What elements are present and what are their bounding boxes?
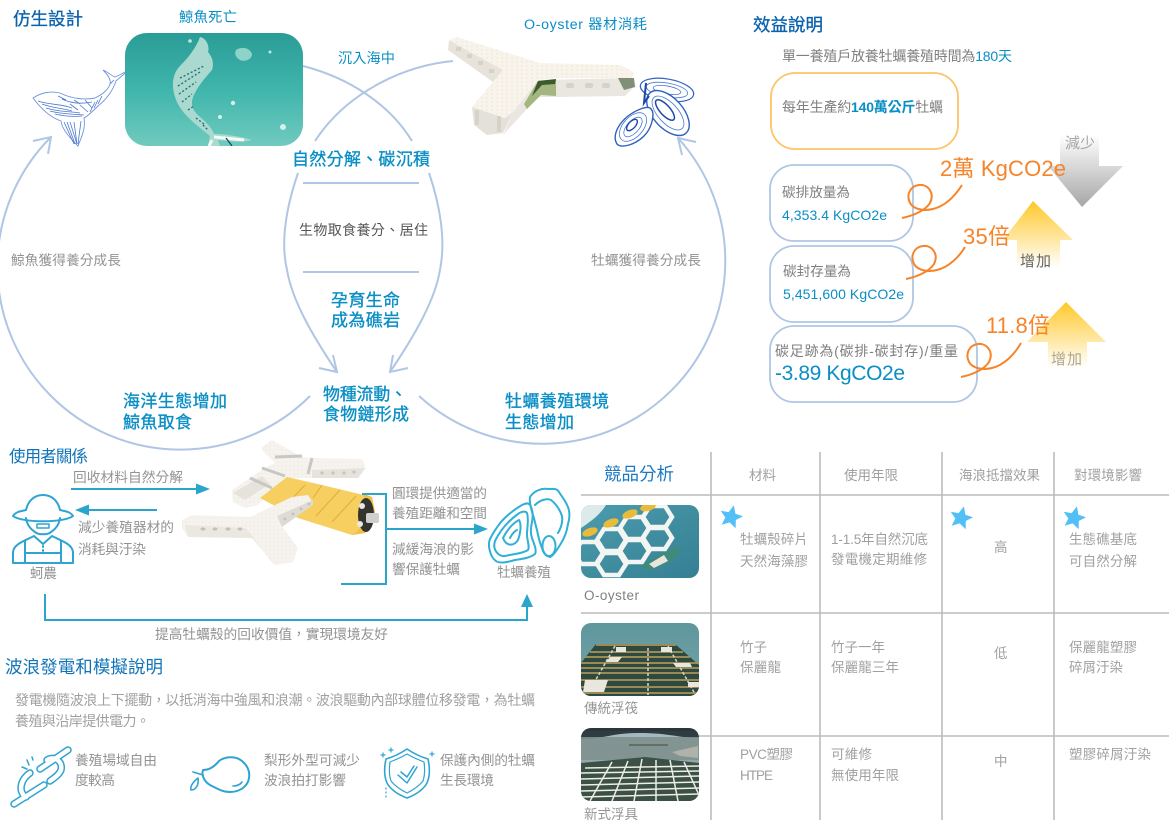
row: traditional raft data: 保麗龍塑膠 [1069,639,1137,655]
row: new float data: PVC塑膠 [740,746,793,762]
arrow: inner left arc to species flow [284,173,337,372]
label: O-oyster equipment wear: O-oyster 器材消耗 [524,17,647,33]
row: new float data [740,746,1151,783]
text: free farming area: 養殖場域自由 [75,752,157,768]
text: reduce equipment wear: 消耗與汙染 [78,542,146,557]
arc: upper left crossing [303,66,412,141]
text: free farming area [75,752,157,788]
label: oyster farmer: 蚵農 [30,566,57,581]
row: traditional raft data: 保麗龍 [740,659,782,675]
panel: competitor analysis table [574,452,1169,822]
row: traditional raft data: 低 [994,646,1008,661]
text: ring provides spacing [392,485,487,521]
label: new float: 新式浮具 [584,807,638,822]
header row: 對環境影響 [1074,467,1142,483]
text: nurture life, become reef: 成為礁岩 [331,311,400,330]
text: species flow, food chain [323,385,409,424]
text: generator description: 發電機隨波浪上下擺動，以抵消海中強風和浪潮。波浪驅動內部球體位移發電，為牡蠣 [15,692,535,708]
arrow: inner right arc to species flow [390,173,442,372]
arrow: increase two: 增加 [1051,351,1082,368]
text: pear shape reduces waves: 波浪拍打影響 [264,772,346,788]
icon: oyster farmer [13,495,73,563]
card: carbon footprint: 碳足跡為(碳排-碳封存)/重量 [775,343,958,359]
card: carbon emissions: 4,353.4 KgCO2e [782,207,887,223]
text: generator description: 養殖與沿岸提供電力。 [15,713,150,729]
row: O-oyster data: 生態礁基底 [1069,531,1137,547]
label: O-oyster: O-oyster [584,588,640,603]
text: marine ecology grows [123,392,227,432]
card: carbon emissions: 碳排放量為 [782,185,850,200]
arrow: decrease [1048,135,1123,207]
figure: 11.8 times: 11.8倍 [986,313,1050,338]
text: raise shell recycling value: 提高牡蠣殼的回收價值，實現環境友好 [155,626,388,642]
row: traditional raft data: 竹子一年 [831,640,885,655]
text: marine ecology grows: 海洋生態增加 [123,392,227,411]
arrow: decrease: 減少 [1065,135,1095,152]
text: generator description [15,692,535,729]
text: pear shape reduces waves [264,752,360,788]
row: new float data: HTPE [740,768,773,783]
photo: whale fall on sea floor [125,33,303,146]
text: organisms feed and live: 生物取食養分、居住 [299,222,428,238]
text: ring provides spacing: 養殖距離和空間 [392,505,487,521]
text: reduce wave impact: 減緩海浪的影 [392,541,474,557]
text: protect inner oysters [440,753,535,788]
card: carbon footprint: -3.89 KgCO2e [775,362,905,385]
row: traditional raft data [740,639,1137,675]
label: sinking into the sea: 沉入海中 [338,51,395,67]
icon: sketched oysters [614,74,697,146]
row: new float data: 無使用年限 [831,767,900,783]
text: marine ecology grows: 鯨魚取食 [123,413,192,432]
card: annual production: 每年生產約140萬公斤牡蠣 [782,99,943,115]
arrow: to device [71,484,210,494]
panel: wave power and simulation [5,657,535,804]
text: nurture life, become reef: 孕育生命 [331,291,400,310]
icon: oyster outline [489,489,569,563]
image: O-oyster hexagon array [581,505,699,578]
row: new float data: 可維修 [831,747,872,762]
header row: 使用年限 [844,467,898,483]
row: O-oyster data [740,531,1137,569]
arrow: farmer to oyster farming [45,594,533,620]
text: species flow, food chain: 物種流動、 [323,385,407,404]
connector: device to oyster farming [341,494,488,584]
text: free farming area: 度較高 [75,772,115,788]
image: O-oyster Y float [448,37,636,135]
arrow: increase two [1027,302,1106,368]
text: oyster habitat grows: 牡蠣養殖環境 [505,392,609,411]
row: new float data: 塑膠碎屑汙染 [1069,746,1151,762]
header row: 海浪抵擋效果 [959,468,1040,483]
icon: orange loop two [906,246,965,279]
row: traditional raft data: 碎屑汙染 [1069,660,1123,675]
image: wave generator device [182,440,379,565]
label: whale death: 鯨魚死亡 [179,9,237,26]
row: traditional raft data: 保麗龍三年 [831,659,899,675]
icon: star material [717,503,745,529]
text: oyster growth: 牡蠣獲得養分成長 [591,252,701,268]
text: species flow, food chain: 食物鏈形成 [323,405,409,424]
divider: lower [303,271,419,273]
text: reduce equipment wear: 減少養殖器材的 [78,519,174,535]
card: annual production [771,73,958,149]
heading: user relationship: 使用者關係 [9,446,88,466]
figure: 20,000 KgCO2e: 2萬 KgCO2e [940,156,1066,181]
row: O-oyster data: 天然海藻膠 [740,553,808,569]
image: traditional bamboo raft [581,623,699,696]
panel: user relationship [9,440,569,642]
icon: pear [191,757,249,792]
divider: upper [303,182,419,184]
arrow: left outer circle to whale [0,137,310,450]
text: reduce wave impact: 響保護牡蠣 [392,561,460,577]
text: pear shape reduces waves: 梨形外型可減少 [264,752,360,768]
label: oyster farming: 牡蠣養殖 [497,564,551,580]
icon: orange loop one [902,185,962,218]
text: nurture life, become reef [331,291,400,330]
text: whale growth: 鯨魚獲得養分成長 [11,252,121,268]
card: carbon footprint [770,326,977,402]
table grid [581,452,1169,820]
text: ring provides spacing: 圓環提供適當的 [392,485,487,501]
icon: star environment [1060,504,1088,530]
icon: orange loop three [961,343,1021,377]
panel: benefits [753,15,1123,402]
row: O-oyster data: 牡蠣殼碎片 [740,532,808,547]
text: reduce equipment wear [78,519,174,557]
text: recycled material decomposes: 回收材料自然分解 [73,469,183,485]
panel: biomimetic design cycle [0,9,725,450]
header row [749,467,1142,483]
row: traditional raft data: 竹子 [740,640,767,655]
heading: wave power: 波浪發電和模擬說明 [5,657,163,677]
icon: sketched whale [33,70,128,146]
row: O-oyster data: 高 [994,539,1008,555]
text: oyster habitat grows: 生態增加 [505,413,574,432]
card: carbon emissions [770,165,913,241]
row: new float data: 中 [994,754,1008,769]
card: carbon storage: 碳封存量為 [783,264,851,279]
arrow: increase one [1003,201,1073,270]
label: traditional raft: 傳統浮筏 [584,701,638,716]
heading: benefits: 效益說明 [753,15,823,35]
card: carbon storage [770,246,913,322]
row: O-oyster data: 可自然分解 [1069,553,1137,569]
row: O-oyster data: 發電機定期維修 [831,552,928,567]
icon: shield check [381,748,434,798]
icon: broken chain [14,750,68,804]
text: farming period 180 days: 單一養殖戶放養牡蠣養殖時間為180天 [782,48,1012,64]
figure: 35 times: 35倍 [963,224,1010,249]
arc: upper right crossing [315,61,453,141]
arrow: right outer circle to oyster [419,138,725,444]
header row: 材料 [749,468,776,483]
text: reduce wave impact [392,541,474,577]
heading: competitor analysis: 競品分析 [604,464,674,484]
arrow: to farmer [75,504,157,516]
heading: biomimetic design: 仿生設計 [13,9,83,29]
row: O-oyster data: 1-1.5年自然沉底 [831,531,928,547]
icon: star wave effect [947,504,975,530]
image: new float [581,728,699,801]
text: oyster habitat grows [505,392,609,432]
text: protect inner oysters: 保護內側的牡蠣 [440,753,535,768]
heading: natural decomposition, carbon sequestration: 自然分解、碳沉積 [292,150,430,169]
arrow: increase one: 增加 [1020,253,1051,270]
text: protect inner oysters: 生長環境 [440,773,494,788]
card: carbon storage: 5,451,600 KgCO2e [783,286,904,302]
